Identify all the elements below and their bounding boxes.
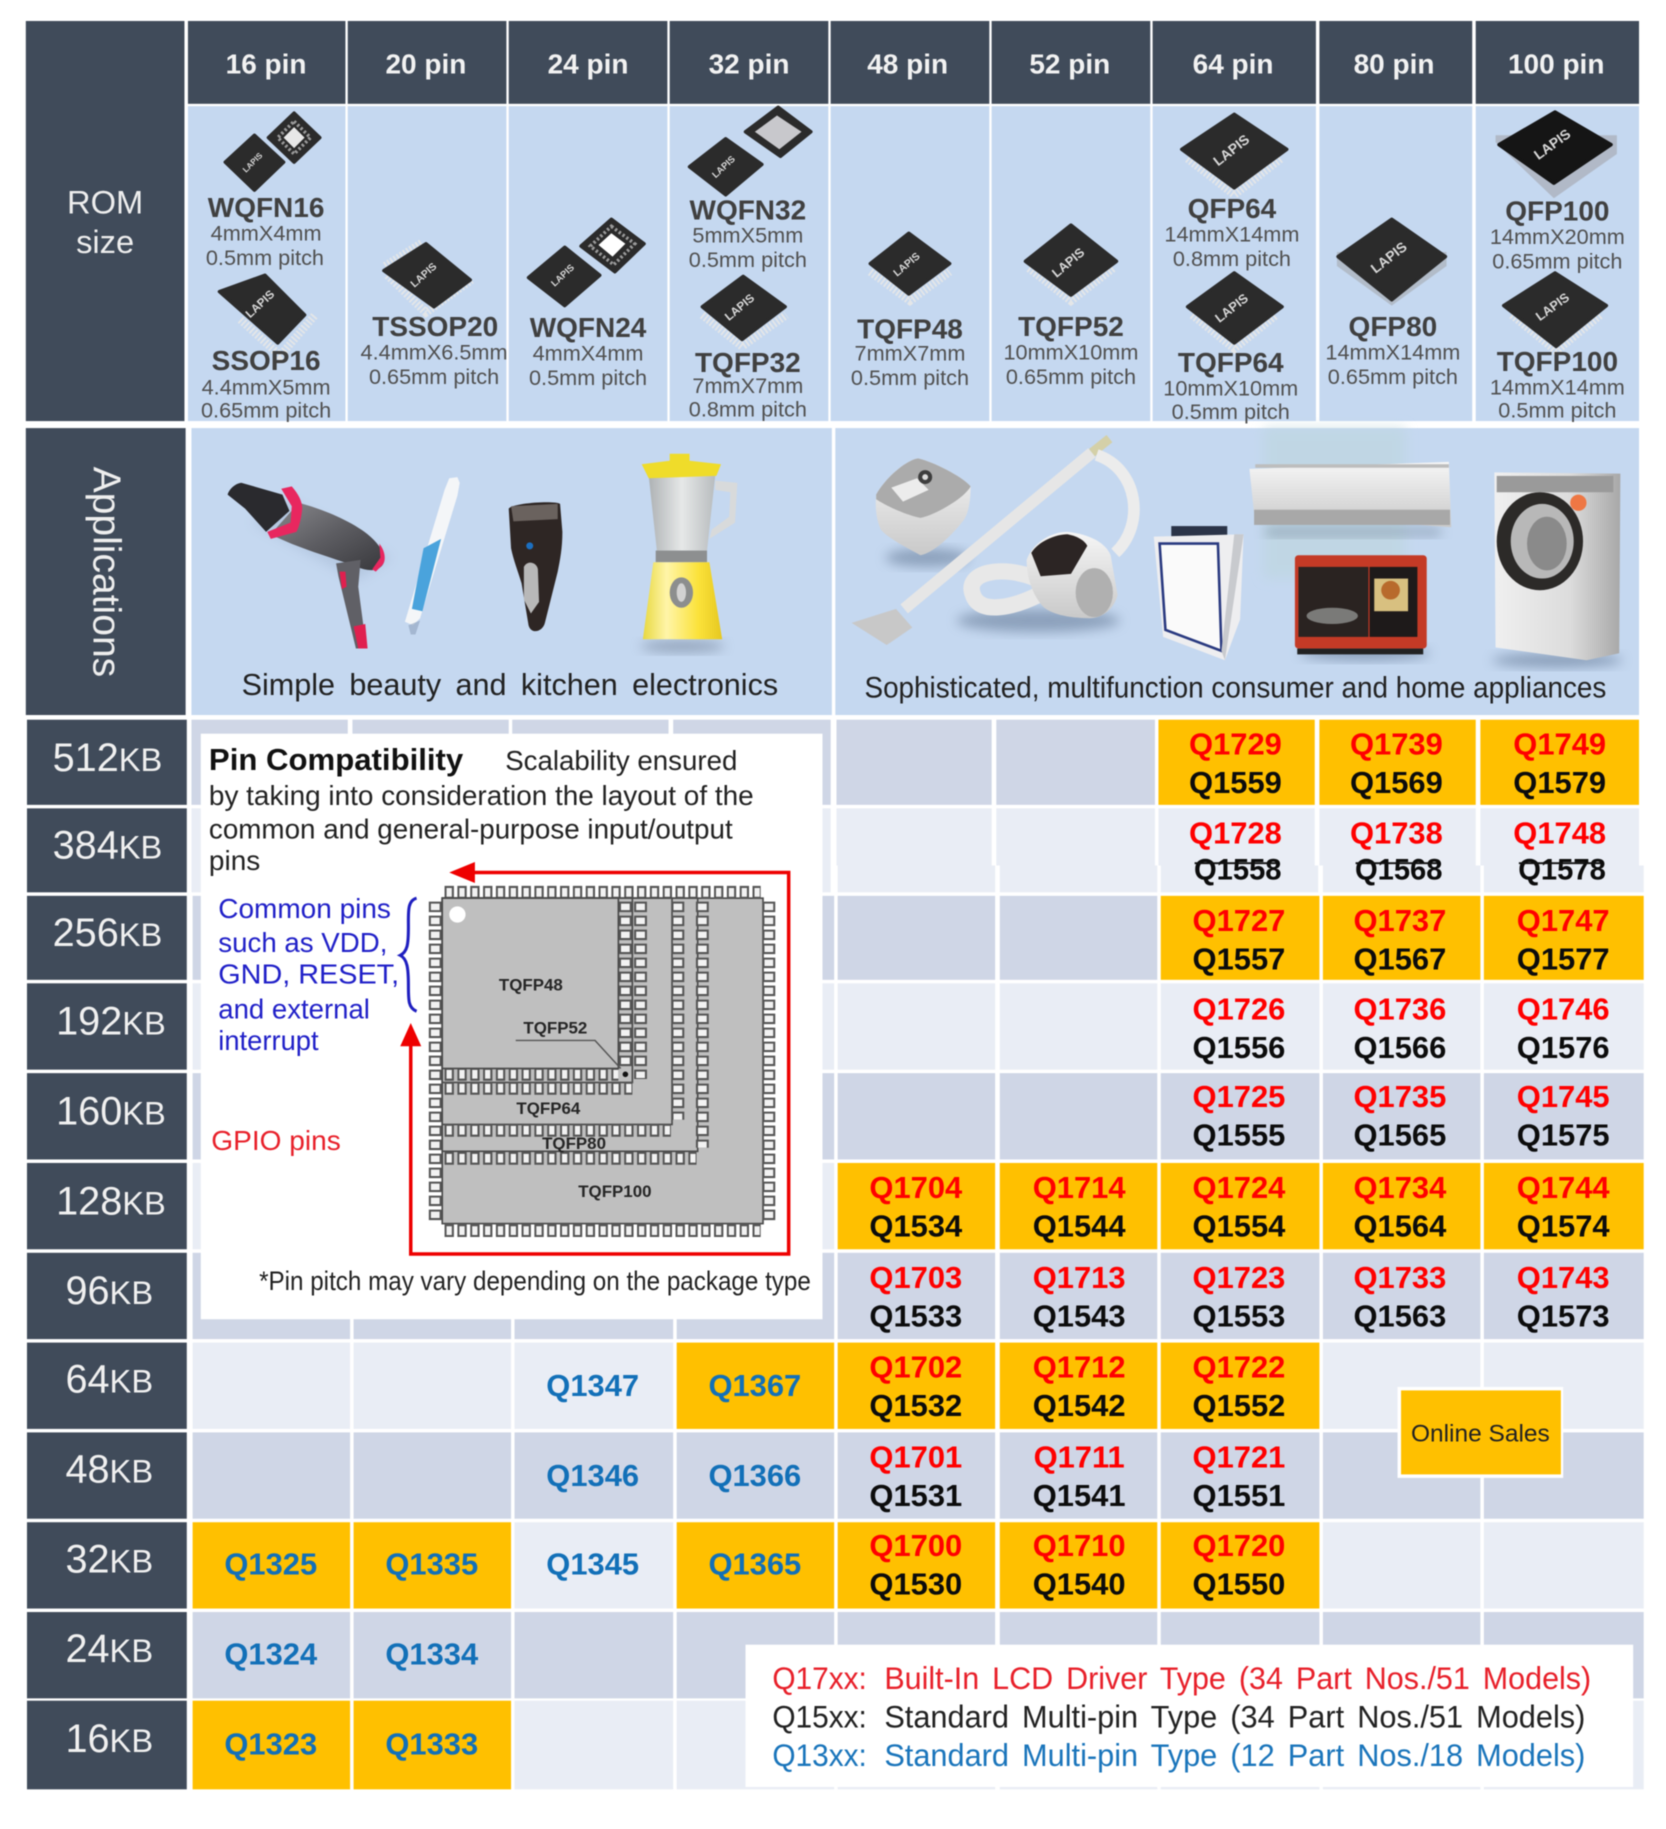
arrow: GPIO direction [400,862,789,1254]
row: 192KB: Q1556 [1193,1030,1285,1065]
row: 96KB: Q1743 [1517,1260,1610,1295]
label: common pins: interrupt [218,1025,319,1056]
label: common pins [218,893,399,1056]
package: QFP100: LAPIS [1531,126,1573,163]
package: SSOP16 [201,275,331,423]
row: 96KB: Q1533 [869,1298,962,1333]
row: 256KB: Q1567 [1353,941,1446,976]
row: 256KB: Q1557 [1193,941,1285,976]
row: 192KB: Q1726 [1193,991,1285,1026]
package: QFP80: QFP80 [1349,311,1437,342]
diagram: nested TQFP packages: TQFP64 [516,1099,581,1118]
row: 32KB: Q1530 [869,1567,962,1602]
left label: ROM size: size [76,223,134,260]
row: 16KB [193,1701,1644,1789]
diagram: nested TQFP packages [435,892,769,1231]
package: TQFP64: 10mmX10mm [1163,375,1298,400]
row: 64KB: Q1367 [708,1368,801,1403]
row: 192KB: Q1576 [1517,1030,1610,1065]
header row: pin counts: 24 pin [548,48,628,79]
package: WQFN32 [689,107,811,272]
package: TQFP32: TQFP32 [695,347,801,378]
row: 96KB: Q1573 [1517,1298,1610,1333]
header row: pin counts: 64 pin [1193,48,1274,79]
row: 64KB: Q1702 [869,1350,962,1385]
row: 96KB: Q1723 [1193,1260,1285,1295]
package: TQFP52 [1003,225,1138,389]
package: SSOP16: LAPIS [243,288,277,321]
row: 128KB: Q1714 [1033,1170,1126,1205]
row: 128KB: Q1554 [1193,1208,1286,1243]
row: 128KB: Q1564 [1353,1208,1447,1243]
row: 32KB: Q1540 [1033,1567,1126,1602]
package: QFP100: QFP100 [1505,195,1609,226]
row: 24KB [193,1612,1644,1698]
ROM size labels: 48KB [65,1448,153,1492]
text block: description: Scalability ensured [505,745,737,776]
diagram: nested TQFP packages: TQFP52 [523,1018,587,1037]
icon: microwave oven [1295,555,1430,660]
package: QFP64: QFP64 [1188,193,1277,224]
row: 96KB: Q1553 [1193,1298,1285,1333]
package: QFP80: 0.65mm pitch [1328,364,1458,389]
row: 64KB: Q1532 [869,1388,962,1423]
label: common pins: Common pins [218,893,391,924]
ROM size labels [27,720,187,1789]
row: 192KB [193,983,1644,1070]
row: 384KB: Q1568 [1355,855,1443,887]
package: TQFP32 [689,276,807,421]
header row: pin counts: 20 pin [385,48,466,79]
row: 128KB: Q1574 [1517,1208,1610,1243]
header row: pin counts: 100 pin [1508,48,1604,79]
package: WQFN32: LAPIS [710,154,737,180]
row: 32KB: Q1335 [385,1547,478,1582]
heading: pin compatibility: Pin Compatibility [209,744,463,777]
row: 32KB: Q1710 [1033,1528,1126,1563]
row: 96KB: Q1733 [1353,1260,1446,1295]
ROM size labels: 384KB [53,824,162,868]
package: QFP100: 14mmX20mm [1490,224,1625,249]
package: WQFN16 [206,113,324,270]
row: 48KB: Q1551 [1193,1478,1285,1513]
legend line: Q17xx: Built-In LCD Driver Type (34 Part Nos./51 Models) [884,1660,1591,1696]
package: TQFP64: TQFP64 [1178,347,1284,378]
package: QFP80 [1325,219,1460,389]
label: common pins: such as VDD, [218,927,387,958]
package: TSSOP20: LAPIS [409,261,439,290]
row: 256KB: Q1737 [1353,903,1446,938]
row: 160KB [193,1073,1644,1159]
label: GPIO pins: GPIO pins [211,1125,341,1156]
row: 32KB: Q1345 [546,1547,639,1582]
package: WQFN32: WQFN32 [690,194,806,225]
icon: vacuum cleaner [852,439,1134,645]
row: 96KB: Q1703 [869,1260,962,1295]
package: SSOP16: 4.4mmX5mm [202,374,331,399]
icon: rice cooker [876,458,971,567]
row: 384KB: Q1558 [1194,855,1282,887]
package: WQFN32: 0.5mm pitch [689,247,807,272]
icon: blue brace [400,898,417,1011]
row: 32KB: Q1325 [224,1547,317,1582]
row: 160KB: Q1565 [1353,1117,1446,1152]
label: common pins: GND, RESET, [218,958,399,989]
ROM size labels: 32KB [65,1537,153,1581]
row: 192KB: Q1746 [1517,991,1610,1026]
row: 160KB: Q1725 [1193,1079,1285,1114]
package: TSSOP20: 4.4mmX6.5mm [361,339,508,364]
package: WQFN16: 0.5mm pitch [206,245,324,270]
left label: ROM size [26,21,184,421]
package: TSSOP20: 0.65mm pitch [369,364,499,389]
text block: description [209,745,754,876]
row: 512KB: Q1749 [1513,727,1606,762]
row: 16KB: Q1333 [385,1726,478,1761]
package: TQFP52: 0.65mm pitch [1006,364,1136,389]
row: 128KB: Q1534 [869,1208,963,1243]
package: TQFP100: 14mmX14mm [1490,374,1625,399]
row: 32KB [193,1522,1644,1609]
row: 48KB: Q1701 [869,1439,962,1474]
text block: description: pins [209,845,260,876]
icon: electric toothbrush [405,477,460,635]
row: 128KB [193,1163,1644,1249]
package: TQFP52: 10mmX10mm [1003,339,1138,364]
row: 384KB: Q1738 [1350,815,1443,850]
ROM size labels: 16KB [65,1717,153,1761]
row: 128KB: Q1734 [1353,1170,1447,1205]
package: TQFP48: 0.5mm pitch [851,365,969,390]
row: 512KB: Q1739 [1350,727,1443,762]
text block: description: by taking into consideration the layout of the [209,780,754,811]
row: 96KB [193,1253,1644,1339]
icon: air purifier [1154,526,1244,660]
row: 48KB: Q1541 [1033,1478,1126,1513]
row: 160KB: Q1735 [1353,1079,1446,1114]
row: 384KB: Q1578 [1518,855,1606,887]
row: 96KB: Q1713 [1033,1260,1126,1295]
package: TQFP48: LAPIS [892,251,923,279]
legend line: Q15xx: Q15xx: [772,1699,867,1735]
package: TQFP64 [1163,273,1298,424]
package: QFP80: 14mmX14mm [1325,339,1460,364]
row: 24KB: Q1334 [385,1637,479,1672]
package: WQFN24: 0.5mm pitch [529,365,647,390]
label: common pins: and external [218,993,370,1024]
caption: sophisticated, multifunction appliances: Sophisticated, multifunction consumer and home appliances [864,673,1606,705]
row: 160KB: Q1745 [1517,1079,1610,1114]
row: 128KB: Q1744 [1517,1170,1610,1205]
package: QFP64: LAPIS [1210,131,1252,169]
ROM size labels: 96KB [65,1269,153,1313]
icon: washing machine [1492,472,1623,667]
row: 32KB: Q1365 [708,1547,801,1582]
header row: pin counts: 80 pin [1354,48,1435,79]
row: 64KB [193,1343,1644,1429]
row: 384KB: Q1748 [1513,815,1606,850]
row: 48KB: Q1531 [869,1478,962,1513]
row: 256KB: Q1727 [1193,903,1285,938]
icon: air conditioner [1249,462,1451,537]
package: TQFP52: LAPIS [1049,244,1088,280]
package: WQFN32: 5mmX5mm [692,223,803,248]
row: 512KB: Q1569 [1350,765,1443,800]
package: TQFP32: 0.8mm pitch [689,396,807,421]
row: 256KB: Q1747 [1517,903,1610,938]
caption: simple beauty and kitchen electronics: Simple beauty and kitchen electronics [242,669,778,702]
legend [746,1645,1633,1787]
ROM size labels: 64KB [65,1358,153,1402]
package: WQFN16: WQFN16 [208,192,324,223]
row: 48KB: Q1346 [546,1458,639,1493]
package: SSOP16: SSOP16 [212,345,321,376]
package: WQFN16: LAPIS [241,151,265,174]
row: 16KB: Q1323 [224,1726,317,1761]
row: 96KB: Q1543 [1033,1298,1126,1333]
row: 384KB: Q1728 [1189,815,1282,850]
row: 256KB: Q1577 [1517,941,1610,976]
package: TSSOP20 [361,243,508,389]
package: WQFN24: 4mmX4mm [533,340,643,365]
row: 32KB: Q1700 [869,1528,962,1563]
package: TSSOP20: TSSOP20 [372,311,498,342]
package: TQFP100: 0.5mm pitch [1498,398,1616,423]
ROM size labels: 256KB [53,911,162,955]
package: TQFP100 [1490,273,1625,423]
header row: pin counts: 16 pin [226,48,307,79]
row: 64KB: Q1712 [1033,1350,1126,1385]
ROM size labels: 160KB [56,1089,166,1133]
row: 512KB: Q1729 [1189,727,1282,762]
package: TQFP64: LAPIS [1212,290,1251,325]
row: 384KB [191,808,1644,892]
package: TQFP64: 0.5mm pitch [1172,399,1290,424]
row: 256KB [193,896,1644,980]
package: TQFP48: 7mmX7mm [855,340,965,365]
panel: sophisticated home appliances [835,427,1639,715]
row: 512KB [191,720,1639,805]
row: 96KB: Q1563 [1353,1298,1446,1333]
header row: pin counts: 52 pin [1029,48,1110,79]
row: 512KB: Q1579 [1513,765,1606,800]
row: 512KB: Q1559 [1189,765,1282,800]
footnote: *Pin pitch may vary depending on the package type [259,1266,811,1296]
legend line: Q17xx: Q17xx: [772,1660,867,1696]
package: SSOP16: 0.65mm pitch [201,398,331,423]
package: QFP64: 14mmX14mm [1164,221,1299,246]
package: TQFP100: LAPIS [1533,289,1572,324]
package: WQFN16: 4mmX4mm [211,220,322,245]
ROM size labels: 192KB [56,1000,166,1044]
diagram: nested TQFP packages: TQFP100 [578,1182,652,1201]
package: QFP100: 0.65mm pitch [1492,248,1622,273]
left label: ROM size: ROM [67,183,143,220]
row: 160KB: Q1575 [1517,1117,1610,1152]
icon: blender [641,454,737,652]
row: 48KB: Q1721 [1193,1439,1285,1474]
row: 192KB: Q1566 [1353,1030,1446,1065]
panel: pin compatibility [201,734,823,1319]
package row backgrounds [188,106,1639,421]
package: TQFP52: TQFP52 [1018,311,1124,342]
icon: hair dryer [228,483,392,649]
row: 192KB: Q1736 [1353,991,1446,1026]
header row: pin counts: 32 pin [709,48,789,79]
legend line: Q15xx: Standard Multi-pin Type (34 Part Nos./51 Models) [884,1699,1585,1735]
row: 48KB: Q1711 [1034,1439,1125,1474]
row: 64KB: Q1347 [546,1368,639,1403]
header row: pin counts: 48 pin [867,48,948,79]
package: QFP64 [1164,114,1299,271]
package: TQFP48 [851,233,969,390]
ROM size labels: 24KB [65,1627,153,1671]
header row: pin counts [188,21,1639,104]
package: WQFN24: LAPIS [549,262,576,288]
row: 64KB: Q1722 [1193,1350,1285,1385]
package: QFP80: LAPIS [1367,238,1410,276]
package: TQFP32: 7mmX7mm [692,373,803,398]
row: 64KB: Q1552 [1193,1388,1285,1423]
package: QFP100 [1490,112,1625,273]
row: 48KB [193,1432,1644,1519]
package: TQFP48: TQFP48 [857,313,963,344]
left label: Applications: Applications [84,467,127,677]
callout: online sales: Online Sales [1411,1421,1550,1448]
package: TQFP32: LAPIS [722,291,757,324]
row: 160KB: Q1555 [1193,1117,1285,1152]
diagram: nested TQFP packages: TQFP48 [499,975,563,994]
diagram: nested TQFP packages: TQFP80 [542,1134,606,1153]
row: 48KB: Q1366 [708,1458,801,1493]
left label: Applications [26,428,186,715]
callout: online sales [1398,1387,1563,1478]
package: WQFN24 [529,219,647,390]
panel: simple beauty and kitchen electronics [191,428,832,715]
legend line: Q13xx: Standard Multi-pin Type (12 Part Nos./18 Models) [884,1737,1585,1773]
text block: description: common and general-purpose input/output [209,814,733,845]
row: 32KB: Q1550 [1193,1567,1285,1602]
package: WQFN24: WQFN24 [530,312,647,343]
ROM size labels: 512KB [53,736,162,780]
ROM size labels: 128KB [56,1179,166,1223]
row: 128KB: Q1544 [1033,1208,1126,1243]
row: 128KB: Q1724 [1193,1170,1286,1205]
legend line: Q13xx: Q13xx: [772,1737,867,1773]
package: QFP64: 0.8mm pitch [1173,246,1291,271]
row: 128KB: Q1704 [869,1170,963,1205]
row: 64KB: Q1542 [1033,1388,1126,1423]
package: TQFP100: TQFP100 [1497,346,1618,377]
icon: shaver [509,502,562,631]
row: 24KB: Q1324 [224,1637,318,1672]
row: 32KB: Q1720 [1193,1528,1285,1563]
